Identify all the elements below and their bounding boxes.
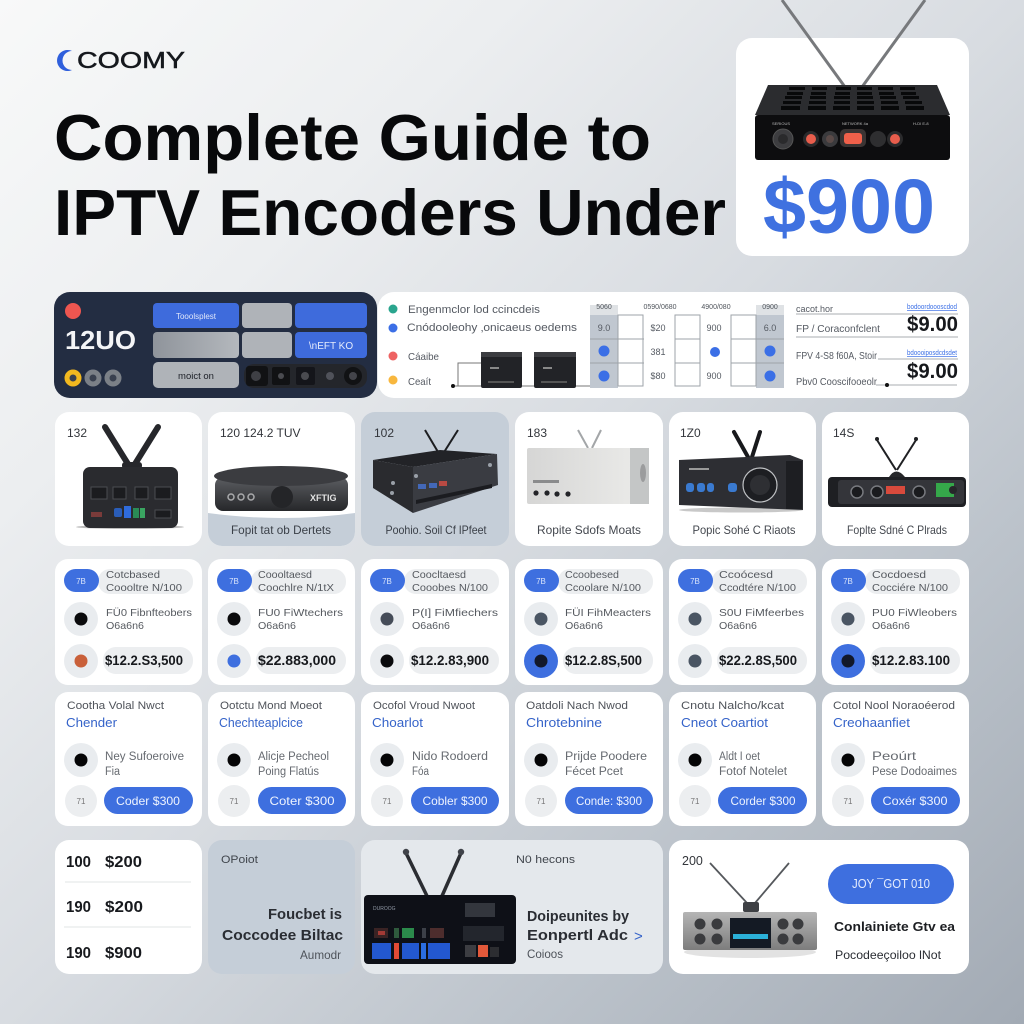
panel: spec card 5: Ccoócesd — [719, 569, 773, 581]
panel: spec card 4: Ccoobesed — [565, 569, 619, 581]
panel: gray callout: Aumodr — [300, 948, 341, 962]
panel: spec card 4: Ccoolare N/100 — [565, 582, 641, 594]
icon: dark encoder with dial — [679, 432, 803, 512]
panel: device card 6 — [822, 412, 969, 546]
panel: offer card 6: Coxér $300 — [882, 794, 948, 808]
panel: spec card 1: FÜ0 Fibnfteobers — [106, 607, 192, 619]
panel: offer card 4 — [515, 692, 663, 826]
panel: device card 5: 1Z0 — [680, 426, 701, 440]
panel: spec card 3: 7B — [382, 577, 392, 586]
panel: spec card 6: O6a6n6 — [872, 620, 910, 632]
panel: offer card 4: 71 — [537, 797, 546, 806]
panel: device card 5: Popic Sohé C Riaots — [692, 523, 796, 537]
logo: COOMY — [77, 47, 185, 73]
price list: cacot.hor — [796, 304, 833, 314]
price list: bdoooiposdcdsdet — [907, 350, 957, 357]
panel: offer card 1: Coder $300 — [116, 794, 180, 808]
panel: offer card 6: Pese Dodoaimes — [872, 766, 957, 778]
panel: offer card 1: Chender — [66, 715, 118, 730]
panel: offer card 5: Fotof Notelet — [719, 766, 788, 778]
price grid: 381 — [650, 347, 666, 357]
panel: offer card 3: Choarlot — [372, 715, 423, 730]
panel: price list: 190 — [66, 945, 91, 962]
panel: offer card 1: Cootha Volal Nwct — [67, 700, 164, 712]
panel: spec card 2: Coochlre N/1tX — [258, 582, 334, 594]
panel: spec card 3: O6a6n6 — [412, 620, 450, 632]
panel: offer card 1: 71 — [77, 797, 86, 806]
panel: device card 2: 120 124.2 TUV — [220, 426, 301, 440]
price list: $9.00 — [907, 313, 958, 336]
price grid: 4900/080 — [701, 304, 731, 311]
panel: offer card 5: 71 — [691, 797, 700, 806]
button grid: \nEFT KO — [309, 341, 353, 352]
panel: gray callout — [208, 840, 355, 974]
icon: square encoder — [76, 427, 184, 529]
panel: offer card 3: Fóa — [412, 766, 430, 778]
panel: spec card 2: FU0 FiWtechers — [258, 607, 343, 619]
icon: round puck encoder: XFTIG — [310, 493, 336, 503]
panel: spec card 4: $12.2.8S,500 — [565, 653, 642, 668]
panel: device card 6: Foplte Sdné C Plrads — [847, 523, 947, 537]
panel: offer card 4: Prijde Poodere — [565, 751, 647, 763]
panel: wide device callout: Coioos — [527, 947, 563, 961]
panel: offer card 4: Chrotebnine — [526, 715, 602, 730]
panel: spec card 3: P(I] FiMfiechers — [412, 607, 498, 619]
panel: offer card 6: Cotol Nool Noraoéerod — [833, 700, 955, 712]
panel: device card 2: Fopit tat ob Dertets — [231, 523, 331, 537]
price list: FP / Coraconfclent — [796, 323, 880, 335]
panel: spec card 3 — [361, 559, 509, 685]
price grid: 6.0 — [764, 323, 776, 333]
panel: spec card 5: Ccodtére N/100 — [719, 582, 796, 594]
panel: device card 4: 183 — [527, 426, 547, 440]
button grid — [153, 303, 367, 388]
panel: spec card 1: Cotcbased — [106, 569, 160, 581]
panel: offer card 2: Poing Flatús — [258, 766, 319, 778]
panel: offer card 6: Creohaanfiet — [833, 715, 910, 730]
icon: angled encoder box — [373, 430, 498, 513]
panel: spec card 6: Cocciére N/100 — [872, 582, 948, 594]
knob strip — [244, 364, 367, 388]
panel: spec card 6: 7B — [843, 577, 853, 586]
icon: silver console with screen — [683, 863, 817, 958]
panel: device card 2 — [208, 412, 355, 546]
price grid: 0900 — [762, 304, 778, 311]
price grid: 900 — [706, 371, 722, 381]
panel: spec card 6 — [822, 559, 969, 685]
panel: spec card 4 — [515, 559, 663, 685]
panel: spec card 1: O6a6n6 — [106, 620, 144, 632]
panel: spec card 2: 7B — [229, 577, 239, 586]
icon: round puck encoder — [214, 466, 348, 511]
panel: dark control panel — [54, 292, 377, 398]
icon: silver encoder — [527, 430, 649, 504]
panel: wide device callout: N0 hecons — [516, 854, 576, 866]
panel: offer card 1 — [55, 692, 202, 826]
panel: price list: $900 — [105, 945, 142, 962]
icon: control console: DUROOG — [373, 906, 396, 912]
panel: offer card 4: Conde: $300 — [576, 794, 642, 808]
panel: device card 3: 102 — [374, 426, 394, 440]
legend: Ceaít — [408, 376, 431, 388]
panel: price list — [55, 840, 202, 974]
panel: offer card 2: Alicje Pecheol — [258, 751, 329, 763]
panel: spec card 5: S0U FiMfeerbes — [719, 607, 804, 619]
status rings — [67, 372, 119, 384]
panel: offer card 3: 71 — [383, 797, 392, 806]
panel: wide device callout: > — [634, 928, 643, 945]
panel: spec card 1: Coooltre N/100 — [106, 582, 182, 594]
panel: spec card 3: Coocltaesd — [412, 569, 466, 581]
price grid: $80 — [650, 371, 666, 381]
panel: offer card 6: 71 — [844, 797, 853, 806]
panel: price list: 100 — [66, 854, 91, 871]
panel: spec card 1 — [55, 559, 202, 685]
legend: Cáaibe — [408, 351, 439, 363]
panel: offer card 6: Peoúrt — [872, 751, 917, 763]
price list: FPV 4-S8 f60A, Stoir — [796, 350, 877, 362]
title: IPTV Encoders Under — [54, 176, 726, 249]
panel: spec card 5: $22.2.8S,500 — [719, 653, 797, 668]
panel: spec card 6: $12.2.83.100 — [872, 653, 950, 668]
panel: offer card 3: Ocofol Vroud Nwoot — [373, 700, 475, 712]
panel: offer card 3 — [361, 692, 509, 826]
panel: offer card 3: Cobler $300 — [422, 794, 488, 808]
panel: call to action card: Pocodeeçoiloo lNot — [835, 948, 942, 962]
panel: call to action card: Conlainiete Gtv ea — [834, 919, 956, 934]
panel: device card 1 — [55, 412, 202, 546]
panel: device card 4 — [515, 412, 663, 546]
panel: price list: $200 — [105, 899, 143, 916]
panel: spec card 3: $12.2.83,900 — [411, 653, 489, 668]
panel: gray callout: Coccodee Biltac — [222, 927, 343, 944]
big number: 12UO — [65, 325, 136, 355]
panel: offer card 5 — [669, 692, 816, 826]
panel: offer card 5: Cnotu Nalcho/kcat — [681, 700, 784, 712]
panel: comparison table — [378, 292, 969, 398]
panel: gray callout: OPoiot — [221, 854, 258, 866]
panel: device card 4: Ropite Sdofs Moats — [537, 523, 641, 537]
icon: flat encoder with green ports — [828, 437, 966, 507]
price grid: 5060 — [596, 304, 612, 311]
panel: spec card 2: $22.883,000 — [258, 653, 336, 668]
button grid: moict on — [178, 371, 214, 382]
price list: bodoordoooscdod — [907, 304, 957, 311]
panel: offer card 2: Coter $300 — [270, 794, 335, 808]
panel: offer card 6 — [822, 692, 969, 826]
panel: device card 5 — [669, 412, 816, 546]
legend: Engenmclor lod ccincdeis — [408, 304, 541, 316]
panel: price list: $200 — [105, 854, 142, 871]
panel: spec card 6: Cocdoesd — [872, 569, 926, 581]
panel: offer card 5: Corder $300 — [730, 794, 796, 808]
price grid: $20 — [650, 323, 666, 333]
icon: hero encoder with antennas: SERIOUS — [772, 121, 790, 126]
panel: wide device callout — [361, 840, 663, 974]
panel: device card 6: 14S — [833, 426, 854, 440]
panel: spec card 2: Coooltaesd — [258, 569, 312, 581]
panel: call to action card: JOY ¯GOT 010 — [852, 876, 930, 891]
panel: spec card 2: O6a6n6 — [258, 620, 296, 632]
panel: call to action card: 200 — [682, 854, 703, 868]
panel: gray callout: Foucbet is — [268, 906, 342, 923]
panel: spec card 4: O6a6n6 — [565, 620, 603, 632]
legend — [388, 304, 578, 388]
panel: offer card 5: Aldt I oet — [719, 751, 761, 763]
price grid — [590, 304, 784, 388]
panel: spec card 5: O6a6n6 — [719, 620, 757, 632]
panel: offer card 1: Fia — [105, 766, 121, 778]
icon: control console — [364, 849, 516, 964]
panel: spec card 4: 7B — [536, 577, 546, 586]
panel: offer card 4: Oatdoli Nach Nwod — [526, 700, 628, 712]
panel: spec card 1: 7B — [76, 577, 86, 586]
legend: Cnódooleohy ‚onicaeus oedems — [407, 322, 578, 334]
panel: offer card 2 — [208, 692, 355, 826]
panel: offer card 3: Nido Rodoerd — [412, 751, 488, 763]
panel: spec card 2 — [208, 559, 355, 685]
price grid: 9.0 — [598, 323, 610, 333]
panel: wide device callout: Doipeunites by — [527, 908, 630, 925]
panel: offer card 5: Cneot Coartiot — [681, 715, 768, 730]
panel: device card 1: 132 — [67, 426, 87, 440]
panel: price list: 190 — [66, 899, 91, 916]
button grid: Tooolsplest — [176, 312, 217, 321]
panel: spec card 4: FÜI FihMeacters — [565, 607, 651, 619]
panel: spec card 6: PU0 FiWleobers — [872, 607, 957, 619]
icon: hero encoder with antennas: H-DI E-8 — [913, 121, 929, 126]
panel: spec card 5: 7B — [690, 577, 700, 586]
icon: hero encoder with antennas: NETWORK 4a — [842, 121, 869, 126]
price: $900 — [763, 164, 935, 250]
panel: offer card 2: Chechteaplcice — [219, 715, 303, 730]
price list — [796, 304, 958, 388]
title — [54, 101, 726, 249]
button — [828, 864, 954, 904]
price list: $9.00 — [907, 360, 958, 383]
icon: two encoder boxes with cables — [451, 352, 590, 388]
panel: device card 3: Poohio. Soil Cf IPfeet — [386, 523, 487, 537]
panel: spec card 5 — [669, 559, 816, 685]
panel: spec card 3: Cooobes N/100 — [412, 582, 488, 594]
panel: device card 3 — [361, 412, 509, 546]
logo — [57, 47, 185, 73]
price grid: 900 — [706, 323, 722, 333]
hero price card — [736, 0, 969, 256]
panel: offer card 2: 71 — [230, 797, 239, 806]
panel: offer card 1: Ney Sufoeroive — [105, 751, 184, 763]
title: Complete Guide to — [54, 101, 651, 174]
panel: spec card 1: $12.2.S3,500 — [105, 653, 183, 668]
panel: offer card 4: Fécet Pcet — [565, 766, 624, 778]
price grid: 0590/0680 — [643, 304, 677, 311]
icon: hero encoder with antennas — [755, 0, 950, 160]
panel: offer card 2: Ootctu Mond Moeot — [220, 700, 322, 712]
panel: call to action card — [669, 840, 969, 974]
panel: wide device callout: Eonpertl Adc — [527, 927, 628, 944]
price list: Pbv0 Cooscifooeolr — [796, 376, 877, 388]
